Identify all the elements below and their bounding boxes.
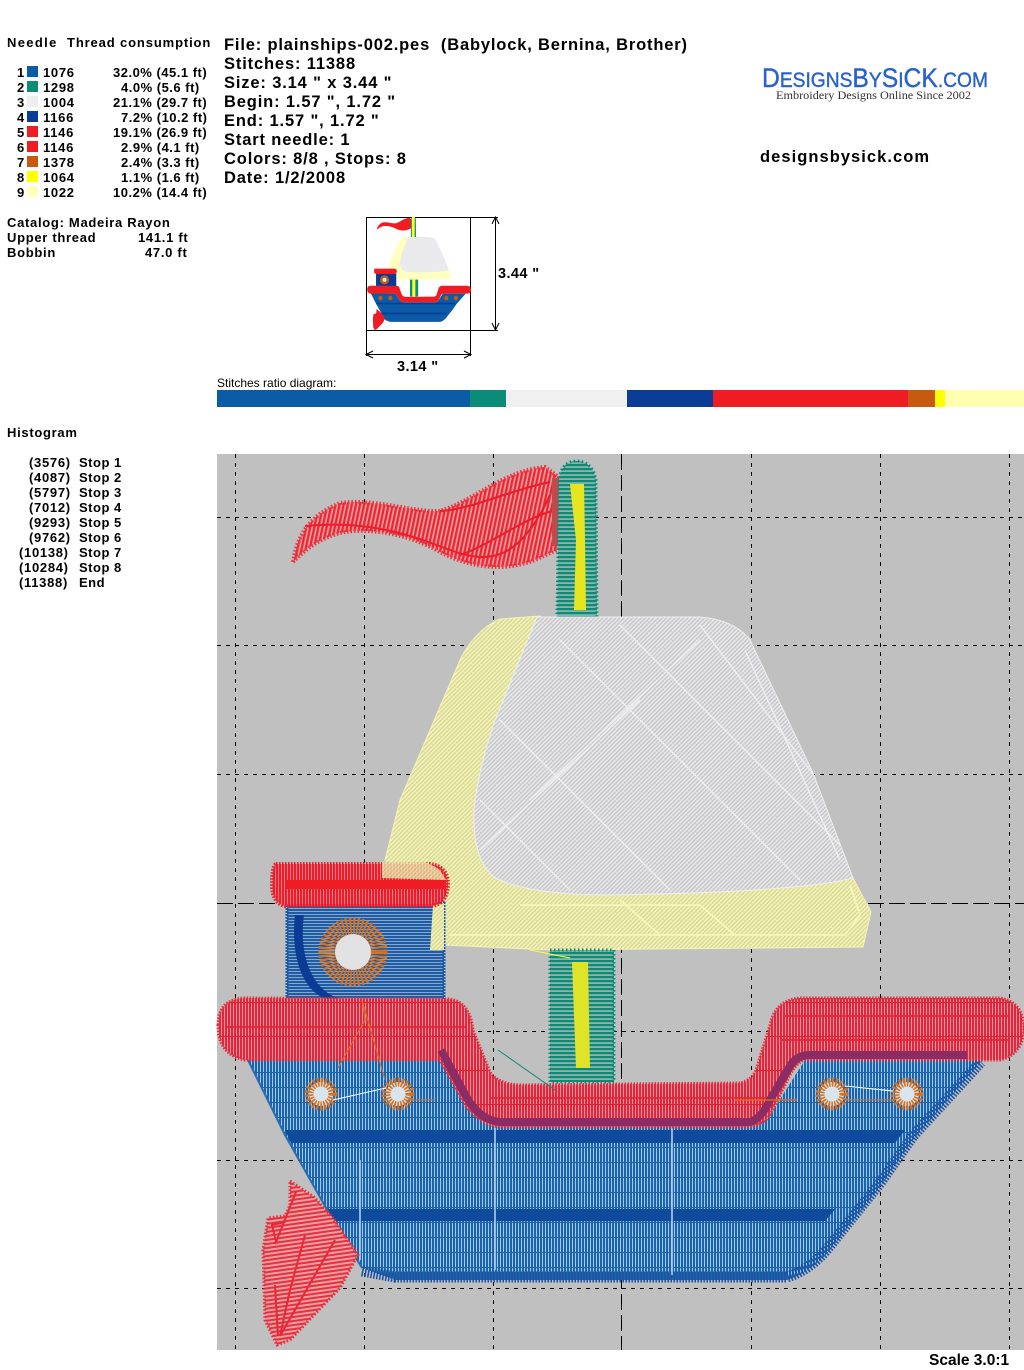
table heading: Needle: [7, 35, 57, 50]
histogram stop list: (10284): [19, 560, 69, 575]
needle row 8: 1064: [43, 170, 75, 185]
sail trim: [385, 616, 871, 950]
needle row 3: [17, 95, 207, 110]
needle row 6: 2.9% (4.1 ft): [121, 140, 200, 155]
histogram stop list: Stop 8: [79, 560, 122, 575]
histogram stop list: (7012): [29, 500, 71, 515]
file information block: Stitches: 11388: [224, 55, 356, 73]
stitch preview panel: [217, 454, 1024, 1350]
stitches ratio bar: [217, 390, 1024, 407]
catalog summary: 47.0 ft: [145, 245, 187, 260]
needle row 6: [17, 140, 200, 155]
sail band stitching: [450, 885, 860, 935]
needle row 7: 7: [17, 155, 25, 170]
needle row 4: 1166: [43, 110, 74, 125]
needle row 2: [17, 80, 200, 95]
logo: DesignsBySick.com: Embroidery Designs Online Since 2002: [776, 88, 971, 102]
histogram stop list: Stop 1: [79, 455, 122, 470]
file information block: Date: 1/2/2008: [224, 169, 346, 187]
needle row 1: [17, 65, 207, 80]
histogram stop list: (11388): [19, 575, 68, 590]
catalog summary: Catalog: Madeira Rayon: [7, 215, 170, 230]
file information block: Start needle: 1: [224, 131, 350, 149]
red deck rail: [218, 998, 1024, 1127]
website address: designsbysick.com: [760, 148, 929, 166]
preview background: [217, 454, 1024, 1350]
histogram stop list: (9762): [29, 530, 71, 545]
thumbnail box: [366, 218, 470, 330]
stitches ratio heading: Stitches ratio diagram:: [217, 376, 336, 390]
file information block: Begin: 1.57 ", 1.72 ": [224, 93, 396, 111]
needle row 9: 1022: [43, 185, 75, 200]
lower mast: [550, 950, 614, 1082]
thumbnail ship: [367, 217, 471, 330]
needle row 3: 3: [17, 95, 25, 110]
histogram stop list: End: [79, 575, 105, 590]
needle row 5: 5: [17, 125, 25, 140]
needle row 5: 19.1% (26.9 ft): [113, 125, 207, 140]
histogram stop list: [19, 455, 122, 590]
histogram stop list: Stop 3: [79, 485, 122, 500]
needle row 9: [17, 185, 207, 200]
file information block: Size: 3.14 " x 3.44 ": [224, 74, 392, 92]
needle row 2: 2: [17, 80, 25, 95]
connecting thread lines: [333, 950, 893, 1100]
histogram stop list: (4087): [29, 470, 71, 485]
height dimension: [471, 217, 499, 330]
histogram stop list: Stop 7: [79, 545, 122, 560]
upper mast: [557, 461, 597, 618]
histogram heading: Histogram: [7, 425, 78, 440]
needle row 6: 6: [17, 140, 25, 155]
catalog summary: Upper thread: [7, 230, 96, 245]
needle row 6: 1146: [43, 140, 74, 155]
histogram stop list: Stop 5: [79, 515, 122, 530]
histogram stop list: Stop 4: [79, 500, 122, 515]
width label: 3.14 ": [397, 359, 439, 375]
needle row 3: 1004: [43, 95, 75, 110]
main sail: [474, 617, 853, 895]
needle row 2: 1298: [43, 80, 75, 95]
logo: DesignsBySick.com: DESIGNSBYSICK.COM: [762, 63, 988, 93]
catalog summary: Bobbin: [7, 245, 56, 260]
needle row 1: 1076: [43, 65, 75, 80]
needle row 5: [17, 125, 207, 140]
table heading: Thread consumption: [67, 35, 211, 50]
cabin window: [327, 926, 379, 978]
needle row 7: [17, 155, 200, 170]
histogram stop list: Stop 6: [79, 530, 122, 545]
file information block: Colors: 8/8 , Stops: 8: [224, 150, 407, 168]
flag: [293, 467, 561, 567]
portholes: [309, 1082, 919, 1106]
needle row 4: 4: [17, 110, 25, 125]
height label: 3.44 ": [498, 266, 540, 282]
histogram stop list: (5797): [29, 485, 71, 500]
needle row 7: 2.4% (3.3 ft): [121, 155, 200, 170]
design thumbnail with dimensions: [366, 217, 540, 375]
cabin roof: [272, 858, 448, 906]
needle row 2: 4.0% (5.6 ft): [121, 80, 200, 95]
rudder: [263, 1181, 358, 1345]
needle row 8: 1.1% (1.6 ft): [121, 170, 200, 185]
file information block: [224, 36, 687, 187]
needle row 5: 1146: [43, 125, 74, 140]
needle row 1: 1: [17, 65, 25, 80]
histogram stop list: (10138): [19, 545, 69, 560]
width dimension: [366, 330, 471, 358]
needle row 1: 32.0% (45.1 ft): [113, 65, 207, 80]
file information block: File: plainships-002.pes (Babylock, Bernina, Brother): [224, 36, 687, 54]
needle row 4: [17, 110, 207, 125]
catalog summary: 141.1 ft: [138, 230, 188, 245]
cabin: [287, 903, 444, 1000]
needle row 7: 1378: [43, 155, 75, 170]
scale label: Scale 3.0:1: [929, 1352, 1010, 1369]
thread consumption table: [7, 35, 211, 200]
hull: [247, 1058, 983, 1280]
histogram stop list: (9293): [29, 515, 71, 530]
file information block: End: 1.57 ", 1.72 ": [224, 112, 380, 130]
catalog summary: [7, 215, 188, 260]
histogram stop list: Stop 2: [79, 470, 122, 485]
needle row 8: [17, 170, 200, 185]
histogram stop list: (3576): [29, 455, 71, 470]
needle row 9: 10.2% (14.4 ft): [113, 185, 207, 200]
needle row 9: 9: [17, 185, 25, 200]
needle row 3: 21.1% (29.7 ft): [113, 95, 207, 110]
needle row 8: 8: [17, 170, 25, 185]
needle row 4: 7.2% (10.2 ft): [121, 110, 207, 125]
